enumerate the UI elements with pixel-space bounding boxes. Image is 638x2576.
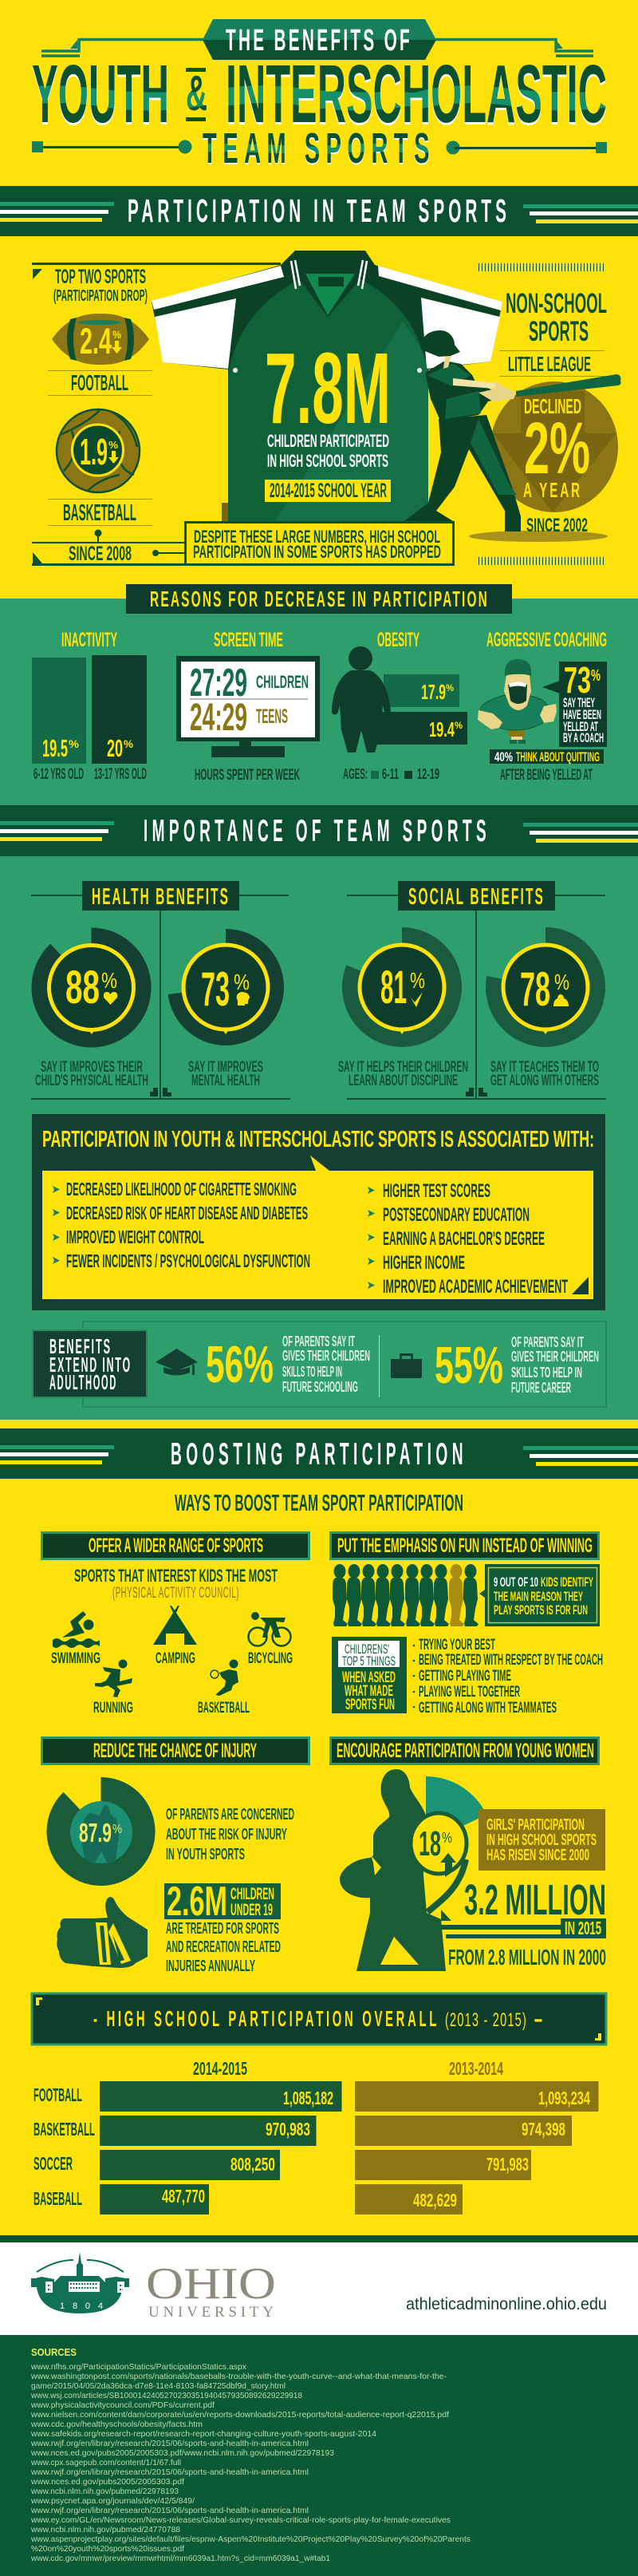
title: & xyxy=(186,66,207,121)
panel: associated with: IMPROVED WEIGHT CONTROL xyxy=(66,1227,204,1247)
chart: screen time: CHILDREN xyxy=(256,672,309,692)
panel: benefits extend into adulthood: EXTEND INTO xyxy=(49,1353,132,1377)
icon: basketball: % xyxy=(108,439,118,451)
panel: reduce injury: CHILDREN xyxy=(230,1885,274,1903)
bar chart: participation by sport: 1,085,182 xyxy=(283,2088,333,2108)
panel: reduce injury: UNDER 19 xyxy=(230,1901,273,1919)
panel: reasons for decrease xyxy=(0,584,638,805)
chart: donut 88%: 88 xyxy=(65,962,100,1013)
panel: emphasis on fun: KIDS IDENTIFY xyxy=(541,1574,593,1590)
footer: sources: www.cdc.gov/healthyschools/obesity/facts.htm xyxy=(30,2420,203,2429)
icon: briefcase xyxy=(391,1353,422,1378)
icon: coach xyxy=(478,659,557,744)
title xyxy=(32,19,607,174)
icon: basketball: 1.9 xyxy=(80,431,108,472)
chart: 18 percent sector xyxy=(426,1776,486,1843)
icon: football xyxy=(52,314,149,365)
panel: reduce injury: INJURIES ANNUALLY xyxy=(166,1958,255,1975)
panel: top two sports: (PARTICIPATION DROP) xyxy=(53,287,148,305)
icon: ten kids xyxy=(333,1564,478,1626)
chart: donut 88%: % xyxy=(101,968,117,993)
footer: sources: %20on%20youth%20sports%20issues.pdf xyxy=(31,2544,184,2554)
panel: benefits extend into adulthood: FUTURE CAREER xyxy=(511,1380,571,1396)
panel: benefits extend into adulthood: 55% xyxy=(435,1336,503,1394)
logo: Ohio University wordmark xyxy=(146,2259,276,2321)
panel: emphasis on fun: CHILDRENS' xyxy=(345,1642,389,1657)
panel: wider range of sports: RUNNING xyxy=(93,1700,133,1717)
footer: sources: www.rwjf.org/en/library/research/2015/06/sports-and-health-in-america.html xyxy=(30,2467,309,2477)
title: TEAM SPORTS xyxy=(203,126,435,174)
bar chart: participation by sport: 791,983 xyxy=(486,2154,529,2175)
chart: donut 81%: % xyxy=(410,968,425,993)
icon: basketball player xyxy=(211,1660,238,1696)
footer: sources: www.washingtonpost.com/sports/nationals/baseballs-trouble-with-the-youth-curve--and-what-that-means-for-the- xyxy=(30,2372,447,2381)
footer: sources: www.psycnet.apa.org/journals/dev/42/5/849/ xyxy=(30,2496,195,2506)
logo: Ohio University wordmark: OHIO xyxy=(146,2259,276,2309)
footer: sources xyxy=(0,2335,638,2576)
panel: associated with: DECREASED RISK OF HEART DISEASE AND DIABETES xyxy=(66,1203,308,1223)
chart: obesity: 12-19 xyxy=(417,766,439,782)
panel: social benefits xyxy=(338,881,606,1100)
panel: social benefits: LEARN ABOUT DISCIPLINE xyxy=(349,1073,458,1089)
website url: athleticadminonline.ohio.edu xyxy=(406,2295,607,2313)
panel: top two sports: SINCE 2008 xyxy=(69,543,132,565)
chart: declined 2 percent xyxy=(490,381,618,512)
panel: benefits extend into adulthood: BENEFITS xyxy=(49,1334,112,1358)
chart: declined 2 percent: DECLINED xyxy=(524,394,581,418)
chart: inactivity xyxy=(32,629,147,783)
footer: sources: www.rwjf.org/en/library/research/2015/06/sports-and-health-in-america.html xyxy=(30,2506,309,2515)
panel: wider range of sports: BASKETBALL xyxy=(198,1700,250,1717)
panel: associated with: HIGHER INCOME xyxy=(383,1252,465,1274)
footer: sources: www.ncbi.nlm.nih.gov/pubmed/22978193 xyxy=(30,2487,179,2496)
logo: Ohio University seal xyxy=(31,2252,129,2313)
chart: donut 87.9%: % xyxy=(112,1823,122,1836)
footer: sources: www.ey.com/GL/en/Newsroom/News-releases/Global-survey-reveals-critical-role-sports-play-for-female-executives xyxy=(30,2515,451,2525)
panel: top two sports: TOP TWO SPORTS xyxy=(55,266,146,288)
footer: sources: www.safekids.org/research-report/research-report-changing-culture-youth-sports-august-2014 xyxy=(30,2429,376,2439)
chart: obesity: % xyxy=(446,682,454,693)
panel: wider range of sports xyxy=(41,1532,309,1717)
illustration: batter xyxy=(404,330,621,531)
panel: reduce injury: IN YOUTH SPORTS xyxy=(166,1846,245,1863)
illustration: woman with bag xyxy=(340,1769,466,1971)
footer: sources: www.cpx.sagepub.com/content/1/1/67.full xyxy=(30,2458,181,2467)
panel: associated with: DECREASED LIKELIHOOD OF CIGARETTE SMOKING xyxy=(66,1179,297,1199)
chart: donut 87.9%: 87.9 xyxy=(79,1818,112,1847)
chart: donut 73%: % xyxy=(234,970,250,994)
icon: graduation cap xyxy=(156,1349,198,1376)
chart: screen time xyxy=(176,629,320,784)
footer: sources: www.nielsen.com/content/dam/corporate/us/en/reports-downloads/2015-reports/total-audience-report-q22015.pdf xyxy=(30,2410,449,2420)
panel: young women xyxy=(330,1738,606,1971)
panel: young women: % xyxy=(442,1830,452,1846)
title: YOUTH xyxy=(32,50,169,142)
panel: health benefits: SAY IT IMPROVES THEIR xyxy=(41,1059,143,1076)
panel: associated with: HIGHER TEST SCORES xyxy=(383,1180,490,1202)
illustration: jersey: 2014-2015 SCHOOL YEAR xyxy=(270,480,387,502)
bar chart: participation by sport: BASKETBALL xyxy=(33,2119,95,2139)
chart: obesity: % xyxy=(455,720,463,731)
chart: inactivity: 6-12 YRS OLD xyxy=(33,766,84,783)
icon: football: % xyxy=(112,328,121,341)
panel: importance background xyxy=(0,856,638,1420)
panel: wider range of sports: CAMPING xyxy=(156,1650,195,1667)
panel: associated with: FEWER INCIDENTS / PSYCHOLOGICAL DYSFUNCTION xyxy=(66,1250,310,1271)
title: YOUTH xyxy=(32,48,169,140)
illustration: jersey: IN HIGH SCHOOL SPORTS xyxy=(267,451,388,471)
banner: high school participation overall: - xyxy=(534,2006,543,2031)
panel: health benefits: HEALTH BENEFITS xyxy=(92,884,230,910)
panel: wider range of sports: SWIMMING xyxy=(51,1650,100,1667)
callout: participation dropped: PARTICIPATION IN SOME SPORTS HAS DROPPED xyxy=(193,542,441,562)
panel: aggressive coaching: SAY THEY xyxy=(563,695,595,710)
panel: young women: IN 2015 xyxy=(565,1918,601,1938)
chart: obesity: OBESITY xyxy=(377,629,419,651)
panel: social benefits: SAY IT HELPS THEIR CHILDREN xyxy=(338,1059,468,1076)
bar chart: participation by sport: 974,398 xyxy=(522,2119,565,2139)
panel: benefits extend into adulthood: FUTURE SCHOOLING xyxy=(282,1379,358,1395)
panel: aggressive coaching: 73 xyxy=(564,659,591,701)
panel: emphasis on fun: 9 OUT OF 10 xyxy=(494,1574,538,1590)
panel: benefits extend into adulthood: OF PARENTS SAY IT xyxy=(282,1333,355,1349)
footer: sources: game/2015/04/05/2da36dca-d7e8-11e4-8103-fa84725dbf9d_story.html xyxy=(31,2381,286,2391)
chart: inactivity: 19.5 xyxy=(42,734,68,762)
panel: aggressive coaching xyxy=(478,629,607,784)
panel: reduce injury: 2.6M xyxy=(167,1879,227,1925)
panel: reduce injury: REDUCE THE CHANCE OF INJURY xyxy=(93,1740,257,1762)
callout: participation dropped xyxy=(185,522,453,565)
chart: inactivity: % xyxy=(69,737,80,750)
footer: sources: www.rwjf.org/en/library/research/2015/06/sports-and-health-in-america.html xyxy=(30,2439,309,2448)
panel: emphasis on fun: GETTING PLAYING TIME xyxy=(419,1668,511,1685)
panel: young women: 18 xyxy=(419,1824,441,1863)
logo: Ohio University seal: 1 8 0 4 xyxy=(60,2301,103,2311)
panel: emphasis on fun: TRYING YOUR BEST xyxy=(419,1637,495,1653)
chart: screen time: 24:29 xyxy=(190,697,247,739)
footer: sources: www.nfhs.org/ParticipationStatics/ParticipationStatics.aspx xyxy=(30,2362,247,2372)
chart: screen time: 27:29 xyxy=(190,662,247,705)
panel: top two sports xyxy=(32,263,455,566)
panel: reduce injury xyxy=(41,1738,309,1975)
chart: inactivity: INACTIVITY xyxy=(61,629,117,651)
section banner: importance of team sports xyxy=(0,805,638,856)
section banner: participation in team sports xyxy=(0,186,638,236)
bar chart: participation by sport: 970,983 xyxy=(266,2119,310,2139)
icon: swimming xyxy=(53,1611,100,1648)
footer: sources: www.aspenprojectplay.org/sites/default/files/espnw-Aspen%20Institute%20Project%20Play%20Survey%20of%20Parents xyxy=(30,2535,471,2544)
chart: donut 87.9% xyxy=(47,1777,156,1886)
panel: health benefits xyxy=(31,881,290,1100)
chart: donut 73%: 73 xyxy=(201,962,230,1016)
panel: benefits extend into adulthood: 56% xyxy=(206,1335,274,1393)
bar chart: participation by sport xyxy=(33,2058,598,2214)
panel: reduce injury: ABOUT THE RISK OF INJURY xyxy=(166,1826,287,1843)
panel: wider range of sports: SPORTS THAT INTEREST KIDS THE MOST xyxy=(74,1566,278,1586)
icon: running xyxy=(95,1660,132,1697)
chart: donut 88% xyxy=(32,927,152,1047)
banner: high school participation overall xyxy=(32,1993,606,2045)
chart: donut 73% xyxy=(168,929,284,1045)
panel: emphasis on fun: WHAT MADE xyxy=(345,1683,393,1700)
chart: donut 78%: 78 xyxy=(520,962,550,1016)
panel: top two sports: FOOTBALL xyxy=(71,370,128,395)
chart: obesity xyxy=(332,629,467,782)
bar chart: participation by sport: SOCCER xyxy=(33,2153,73,2174)
icon: bicycling xyxy=(249,1612,290,1646)
bar chart: participation by sport: 2013-2014 xyxy=(449,2058,503,2079)
bar chart: participation by sport: 808,250 xyxy=(230,2154,275,2175)
footer: sources: www.ncbi.nlm.nih.gov/pubmed/24770788 xyxy=(30,2525,180,2535)
chart: obesity: 17.9 xyxy=(421,680,446,704)
chart: donut 81%: 81 xyxy=(380,962,407,1013)
panel: wider range of sports: BICYCLING xyxy=(248,1650,293,1667)
panel: benefits extend into adulthood xyxy=(33,1322,606,1407)
chart: donut 81% xyxy=(342,927,462,1047)
chart: obesity: 19.4 xyxy=(429,717,455,741)
panel: benefits extend into adulthood: ADULTHOOD xyxy=(49,1370,117,1394)
panel: wider range of sports: (PHYSICAL ACTIVITY COUNCIL) xyxy=(112,1585,239,1602)
panel: non-school sports xyxy=(404,267,621,561)
panel: aggressive coaching: YELLED AT xyxy=(563,719,598,734)
panel: emphasis on fun: TOP 5 THINGS xyxy=(342,1653,396,1669)
bar chart: participation by sport: 2014-2015 xyxy=(193,2058,247,2079)
chart: screen time: TEENS xyxy=(256,705,288,728)
chart: inactivity: % xyxy=(124,737,134,750)
panel: reduce injury: ARE TREATED FOR SPORTS xyxy=(166,1920,279,1938)
panel: benefits extend into adulthood: SKILLS TO HELP IN xyxy=(282,1364,342,1380)
panel: reasons for decrease: 13-17 YRS OLD xyxy=(94,766,147,783)
footer: sources: www.nces.ed.gov/pubs2005/2005303.pdf/www.ncbi.nlm.nih.gov/pubmed/22978193 xyxy=(30,2448,334,2458)
icon: camping xyxy=(153,1606,197,1645)
panel: reduce injury: AND RECREATION RELATED xyxy=(166,1938,281,1956)
panel: non-school sports: SINCE 2002 xyxy=(526,515,588,536)
panel: aggressive coaching: 40% xyxy=(494,749,513,765)
chart: screen time: HOURS SPENT PER WEEK xyxy=(195,767,300,784)
footer: logo strip xyxy=(0,2235,638,2335)
callout: participation dropped: DESPITE THESE LARGE NUMBERS, HIGH SCHOOL xyxy=(194,527,440,547)
panel: wider range of sports: OFFER A WIDER RANGE OF SPORTS xyxy=(89,1535,263,1557)
panel: emphasis on fun xyxy=(330,1532,603,1717)
title: THE BENEFITS OF xyxy=(226,24,412,57)
illustration: jersey xyxy=(152,251,502,521)
footer: sources: www.nces.ed.gov/pubs2005/2005303.pdf xyxy=(30,2477,184,2487)
chart: donut 78%: % xyxy=(554,970,569,994)
title: TEAM SPORTS xyxy=(203,124,435,172)
panel: top two sports: BASKETBALL xyxy=(63,500,136,526)
bar chart: participation by sport: 1,093,234 xyxy=(538,2088,590,2108)
chart: declined 2 percent: A YEAR xyxy=(523,478,582,502)
chart: obesity: AGES: xyxy=(343,766,368,782)
stat: 7.8M: 7.8M xyxy=(265,332,391,444)
section banner: boosting participation xyxy=(0,1428,638,1479)
panel: emphasis on fun: SPORTS FUN xyxy=(345,1697,395,1713)
chart: donut 78% xyxy=(486,927,605,1047)
panel: health benefits: CHILD'S PHYSICAL HEALTH xyxy=(35,1073,148,1089)
illustration: jersey: CHILDREN PARTICIPATED xyxy=(267,431,389,451)
bar chart: participation by sport: 487,770 xyxy=(162,2186,205,2207)
banner: high school participation overall: (2013 - 2015) xyxy=(445,2009,527,2031)
icon: football: 2.4 xyxy=(80,321,112,362)
chart: inactivity: 20 xyxy=(107,734,123,762)
footer: sources: SOURCES xyxy=(31,2347,77,2358)
chart: screen time: SCREEN TIME xyxy=(214,629,283,651)
panel: reduce injury: OF PARENTS ARE CONCERNED xyxy=(166,1806,294,1823)
panel: health benefits: MENTAL HEALTH xyxy=(191,1073,260,1089)
icon: basketball xyxy=(57,409,140,492)
icon: thumbs up xyxy=(57,1897,148,1968)
panel: benefits extend into adulthood: GIVES THEIR CHILDREN xyxy=(282,1348,370,1364)
bar chart: participation by sport: 482,629 xyxy=(413,2190,457,2211)
panel: health benefits: SAY IT IMPROVES xyxy=(188,1059,263,1076)
footer: sources: www.physicalactivitycouncil.com/PDFs/current.pdf xyxy=(30,2400,215,2410)
bar chart: participation by sport: BASEBALL xyxy=(33,2188,82,2209)
panel: associated with xyxy=(32,1114,605,1310)
panel: emphasis on fun: WHEN ASKED xyxy=(342,1669,396,1686)
footer: sources: www.cdc.gov/mmwr/preview/mmwrhtml/mm6039a1.htm?s_cid=mm6039a1_w#tab1 xyxy=(30,2554,330,2563)
logo: Ohio University wordmark: UNIVERSITY xyxy=(148,2304,274,2321)
panel: emphasis on fun: PLAYING WELL TOGETHER xyxy=(419,1684,520,1701)
chart: obesity: 6-11 xyxy=(382,766,399,782)
bar chart: participation by sport: FOOTBALL xyxy=(33,2084,82,2105)
footer: sources: www.wsj.com/articles/SB10001424052702303519404579350892629229918 xyxy=(30,2391,302,2400)
chart: declined 2 percent: 2% xyxy=(524,408,590,489)
panel: aggressive coaching: % xyxy=(591,667,601,685)
